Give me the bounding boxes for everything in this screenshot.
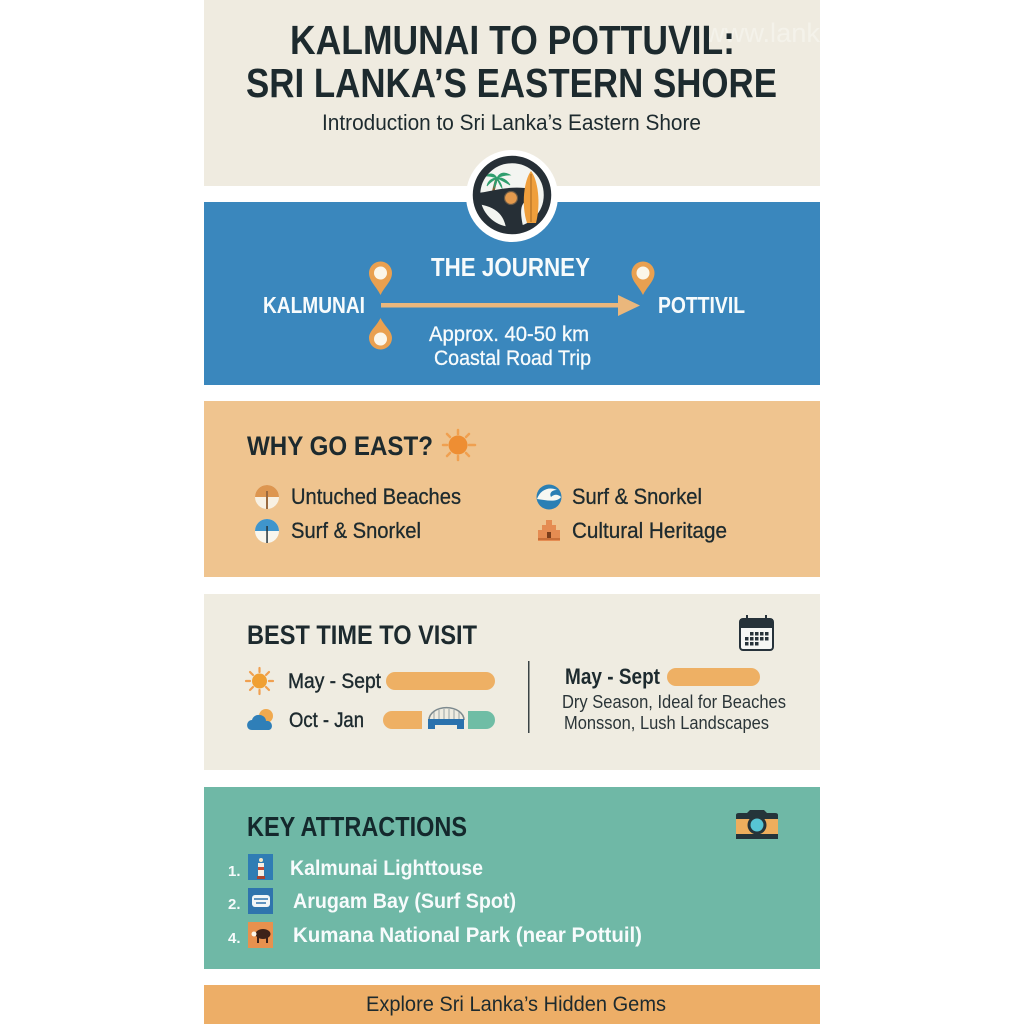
text: surf and snorkel: Surf & Snorkel	[291, 518, 421, 543]
icon: camera	[736, 810, 778, 839]
arrow: route	[381, 295, 640, 316]
list item 1	[228, 854, 483, 880]
panel: footer	[204, 985, 820, 1024]
text: distance	[429, 322, 591, 370]
label: May - Sept: May - Sept	[288, 669, 381, 693]
icon: temple	[538, 520, 560, 541]
text: distance: Approx. 40-50 km	[429, 322, 589, 346]
title	[246, 17, 777, 106]
list item 2	[228, 888, 516, 914]
icon: sun	[246, 668, 273, 694]
list item 4	[228, 922, 642, 948]
icon: end pin	[632, 262, 654, 295]
text: surf and snorkel: Surf & Snorkel	[572, 484, 702, 509]
surfboard	[524, 171, 538, 223]
text: distance: Coastal Road Trip	[434, 346, 591, 370]
subtitle: Introduction to Sri Lanka’s Eastern Shore	[322, 110, 701, 135]
list item 1: 1.	[228, 863, 241, 880]
text: arugam bay: Arugam Bay (Surf Spot)	[293, 889, 516, 913]
text: footer: Explore Sri Lanka’s Hidden Gems	[366, 992, 666, 1016]
icon: lighthouse	[248, 854, 273, 880]
heading: best time to visit: BEST TIME TO VISIT	[247, 620, 477, 650]
panel: key attractions	[204, 787, 820, 969]
icon: beach umbrella	[255, 485, 279, 509]
label: Oct - Jan: Oct - Jan	[289, 708, 364, 732]
title: SRI LANKA’S EASTERN SHORE	[246, 60, 777, 106]
icon: sun	[443, 430, 475, 460]
icon: calendar	[740, 615, 773, 650]
heading: the journey: THE JOURNEY	[431, 252, 590, 282]
list item 2: 2.	[228, 896, 241, 913]
icon: surf spot	[248, 888, 273, 914]
icon: start pin	[369, 262, 392, 295]
icon: blue umbrella	[255, 519, 279, 543]
icon: bridge	[428, 708, 464, 729]
icon: wave	[536, 484, 562, 510]
icon: steering wheel with palm and surfboard	[466, 150, 558, 242]
label: May - Sept detail: May - Sept	[565, 664, 661, 689]
wheel rim and spokes	[476, 160, 548, 233]
panel: why go east	[204, 401, 820, 577]
watermark: www.lank	[704, 18, 820, 48]
label: Pottivil: POTTIVIL	[658, 292, 745, 318]
list item 4: 4.	[228, 930, 241, 947]
text: kumana: Kumana National Park (near Pottuil)	[293, 923, 642, 947]
bar: monsoon start	[383, 711, 422, 729]
heading: why go east: WHY GO EAST?	[247, 431, 433, 461]
text: lighthouse: Kalmunai Lighttouse	[290, 856, 483, 880]
bar: dry season	[386, 672, 495, 690]
icon: drop pin	[369, 318, 392, 350]
label: Kalmunai: KALMUNAI	[263, 292, 365, 318]
panel: best time to visit	[204, 594, 820, 770]
palm tree	[486, 173, 510, 193]
text: untouched beaches: Untuched Beaches	[291, 484, 461, 509]
panel: header	[204, 0, 820, 186]
bar: detail season	[667, 668, 760, 686]
text: cultural heritage: Cultural Heritage	[572, 518, 727, 543]
icon: kumana park	[248, 922, 273, 948]
text: season details	[562, 691, 786, 733]
divider	[528, 661, 530, 733]
wheel hub	[504, 192, 518, 204]
text: season details: Dry Season, Ideal for Beaches	[562, 691, 786, 712]
panel: the journey	[204, 202, 820, 385]
heading: key attractions: KEY ATTRACTIONS	[247, 811, 467, 842]
text: season details: Monsson, Lush Landscapes	[564, 712, 769, 733]
icon: cloud and sun	[247, 709, 273, 730]
title: KALMUNAI TO POTTUVIL:	[290, 17, 735, 63]
bar: monsoon end	[468, 711, 495, 729]
